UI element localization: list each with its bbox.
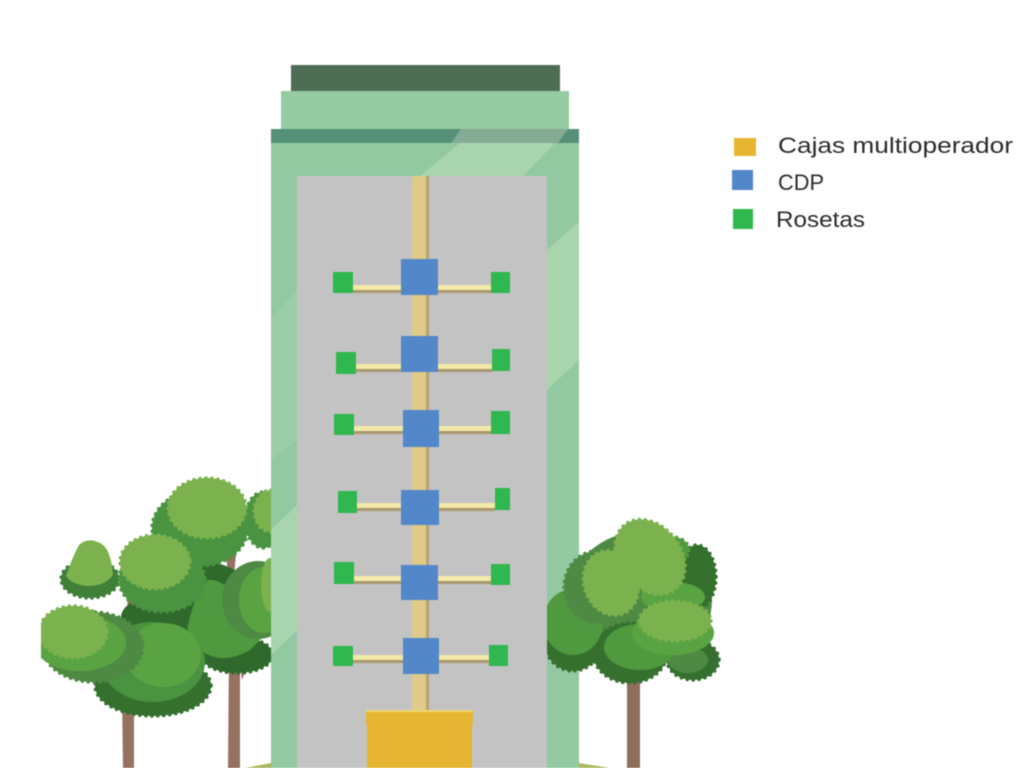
vertical riser (412, 176, 429, 712)
floor 1 (333, 259, 510, 295)
back right foliage (121, 490, 294, 673)
small left crown (61, 540, 119, 598)
grey interior (297, 176, 547, 768)
legend: Rosetas: Rosetas (776, 207, 865, 232)
right tree crown (543, 506, 719, 683)
top tree crown (152, 478, 248, 566)
floor 2 (336, 336, 510, 374)
ground (245, 763, 610, 768)
lower crown (95, 622, 211, 716)
middle crown (119, 535, 205, 612)
legend: CDP (732, 170, 824, 195)
legend (732, 133, 1013, 232)
left trees (34, 478, 294, 768)
roof top (291, 65, 560, 92)
legend: Rosetas (733, 207, 865, 232)
glass sheen (271, 143, 579, 655)
cornice (271, 129, 579, 143)
right tree trunk (627, 680, 640, 768)
left tree trunks (115, 554, 251, 768)
roof middle (281, 91, 569, 129)
floor 3 (334, 410, 510, 447)
floor 4 (338, 488, 510, 525)
big left crown (34, 606, 143, 682)
floor 6 (333, 638, 508, 674)
building (271, 65, 579, 768)
legend: CDP: CDP (778, 170, 824, 195)
multioperator box (366, 710, 473, 768)
right tree (543, 506, 719, 768)
building body (271, 129, 579, 768)
legend: Cajas multioperador: Cajas multioperador (778, 133, 1013, 158)
floor 5 (334, 562, 510, 600)
